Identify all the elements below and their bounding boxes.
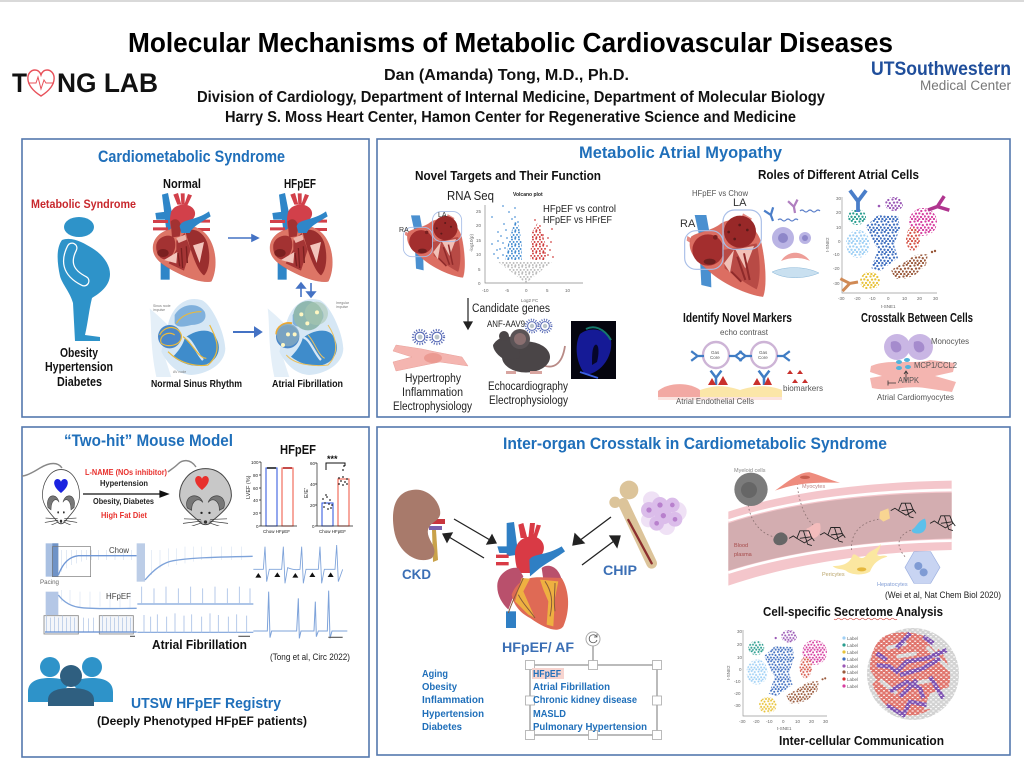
chart: ECG traces (44, 543, 347, 638)
legend: comparisons: HFpEF vs control (543, 204, 616, 215)
chart: spatial hexagon map (867, 628, 959, 720)
icon: atria heart with RA LA (399, 212, 465, 277)
icon: sinus rhythm heart: impulse (153, 308, 165, 312)
legend: cell clusters: Label (847, 643, 858, 648)
legend: cell clusters: Label (847, 670, 858, 675)
chart: volcano plot: 20 (476, 223, 482, 228)
icon: stem cell cluster (641, 491, 687, 535)
diagram: blood vessel secretome: plasma (734, 552, 753, 558)
label: HFpEF AF: HFpEF/ AF (502, 640, 574, 655)
label: echo contrast: echo contrast (720, 327, 769, 337)
legend: cell clusters: Label (847, 650, 858, 655)
label: atrial endothelial cells: Atrial Endothelial Cells (676, 396, 754, 406)
chart: volcano plot: -log10(p) (469, 233, 474, 252)
chart: E/E': 20 (310, 503, 316, 508)
title: Molecular Mechanisms of Metabolic Cardiovascular Diseases (128, 27, 893, 58)
chart: LVEF: LVEF (%) (246, 475, 252, 499)
icon: AAV particles (526, 320, 551, 332)
legend: cell clusters: Label (847, 684, 858, 689)
chart: tSNE secretome: 10 (737, 655, 743, 660)
image: fluorescence heart section (571, 321, 616, 379)
chart: volcano plot: Volcano plot (513, 192, 543, 198)
caption: atrial fibrillation: Atrial Fibrillation (152, 637, 247, 652)
icons: atrial cell types (764, 200, 820, 278)
text list: conditions: Chronic kidney disease (533, 694, 637, 706)
arrows: bidirectional (297, 283, 315, 297)
risk factor list: Hypertension (45, 360, 113, 374)
chart: LVEF: 0 (256, 524, 259, 529)
chart: tSNE clusters: 0 (887, 296, 890, 301)
text: readouts in vivo: Electrophysiology (489, 395, 568, 407)
text list: risk factors: Diabetes (422, 721, 462, 733)
text list: risk factors (422, 668, 484, 733)
label: CHIP: CHIP (603, 563, 637, 578)
logo: UT Southwestern: UTSouthwestern (871, 59, 1011, 80)
diagram: blood vessel secretome (728, 468, 955, 588)
risk factor list: Diabetes (57, 375, 102, 389)
chart: tSNE clusters: -20 (833, 266, 840, 271)
chart: tSNE secretome: 10 (795, 719, 801, 724)
heading: Metabolic Atrial Myopathy (579, 143, 783, 162)
label: metabolic syndrome: Metabolic Syndrome (31, 197, 136, 211)
icon: control mouse (22, 464, 80, 527)
chart: E/E': 0 (312, 524, 315, 529)
chart: LVEF (246, 460, 297, 534)
text list: conditions: HFpEF (533, 668, 561, 680)
chart: volcano plot: Log2 FC (521, 298, 539, 303)
panel: two-hit mouse model (22, 427, 369, 757)
logo: Tong Lab: NG LAB (57, 68, 158, 98)
chart: LVEF: Chow HFpEF (263, 529, 290, 534)
label: chow: Chow (109, 545, 130, 555)
label: normal: Normal (163, 177, 201, 191)
icon: atria heart with RA LA: LA (438, 212, 447, 219)
diagram: monocyte crosstalk (870, 334, 956, 392)
diagram: targeted microbubbles: Gas (759, 350, 768, 355)
chart: tSNE secretome: 30 (823, 719, 829, 724)
text: readouts in vitro (393, 373, 472, 413)
chart: tSNE clusters: 30 (933, 296, 939, 301)
text: readouts in vivo (488, 381, 568, 407)
heading: Cardiometabolic Syndrome (98, 147, 285, 166)
subheading: crosstalk: Crosstalk Between Cells (861, 311, 973, 325)
icon: large atria heart (685, 210, 765, 297)
chart: volcano plot: 0 (525, 288, 528, 293)
legend: cell clusters (842, 636, 858, 689)
arrow: rhythm progression (233, 328, 261, 336)
chart: E/E': Chow HFpEF (319, 529, 346, 534)
icon: sinus rhythm heart: AV node (173, 370, 186, 374)
arrow: normal to HFpEF (228, 235, 258, 241)
icon: mouse (493, 329, 565, 374)
panel: metabolic atrial myopathy (377, 139, 1010, 417)
selection box with handles (526, 632, 662, 740)
diagram: targeted microbubbles: Gas (711, 350, 720, 355)
icon: HFpEF heart (270, 193, 332, 282)
caption: normal sinus rhythm: Normal Sinus Rhythm (151, 379, 242, 390)
logo: Tong Lab: T (12, 68, 27, 98)
chart: tSNE clusters: 10 (902, 296, 908, 301)
label: LA: LA (733, 197, 747, 209)
chart: tSNE secretome: -10 (734, 679, 741, 684)
icon: people group (28, 657, 113, 706)
text: readouts in vivo: Echocardiography (488, 381, 568, 393)
chart: volcano plot: -10 (482, 288, 489, 293)
risk factor list: Obesity (60, 346, 98, 360)
chart: volcano plot: 5 (478, 267, 481, 272)
chart: volcano plot: 5 (546, 288, 549, 293)
chart: volcano plot: 0 (478, 281, 481, 286)
chart: tSNE clusters: -10 (869, 296, 876, 301)
subheading: secretome: Cell-specific Secretome Analysis (763, 605, 943, 619)
chart: tSNE clusters: -30 (833, 281, 840, 286)
diagram: targeted microbubbles (658, 342, 808, 400)
chart: tSNE clusters: -30 (838, 296, 845, 301)
text list: conditions (532, 668, 647, 733)
chart: LVEF: 20 (253, 511, 259, 516)
subheading: registry detail: (Deeply Phenotyped HFpEF patients) (97, 714, 307, 728)
chart: tSNE clusters (825, 190, 949, 309)
text: readouts in vitro: Electrophysiology (393, 401, 472, 413)
text: treatment: Obesity, Diabetes (93, 496, 154, 506)
chart: tSNE clusters: 20 (917, 296, 923, 301)
chart: tSNE secretome: 0 (782, 719, 785, 724)
chart: E/E': E/E' (304, 488, 310, 498)
text list: conditions: Pulmonary Hypertension (533, 721, 647, 733)
risk factor list (45, 346, 113, 389)
diagram: blood vessel secretome: Hepatocytes (877, 582, 908, 588)
arrow: diet treatment (83, 491, 168, 497)
logo: UT Southwestern (871, 59, 1011, 93)
legend: comparisons (543, 204, 616, 226)
chart: volcano plot: -5 (505, 288, 509, 293)
panel: cardiometabolic syndrome (22, 139, 369, 417)
chart: LVEF: 80 (253, 473, 259, 478)
subheading: novel targets: Novel Targets and Their Function (415, 169, 601, 183)
icon: atrial fibrillation heart: Irregular (336, 301, 350, 305)
chart: E/E': *** (327, 454, 338, 464)
chart: tSNE secretome: -20 (734, 691, 741, 696)
icon: sinus rhythm heart (150, 299, 225, 377)
label: HFpEF chart title: HFpEF (280, 442, 316, 457)
logo: Tong Lab (12, 68, 158, 98)
chart: volcano plot: 25 (476, 209, 482, 214)
label: MCP1 CCL2: MCP1/CCL2 (914, 360, 957, 370)
chart: tSNE secretome (726, 629, 829, 731)
label: HFpEF trace: HFpEF (106, 591, 131, 601)
icon: atria heart with RA LA: RA (399, 227, 409, 234)
label: ANF-AAV9: ANF-AAV9 (487, 319, 525, 330)
icon: kidney (393, 490, 445, 562)
chart: E/E': 60 (310, 461, 316, 466)
icon: cardiomyocyte (393, 345, 468, 371)
chart: tSNE secretome: -30 (739, 719, 746, 724)
text list: risk factors: Aging (422, 668, 448, 680)
label: monocytes: Monocytes (931, 336, 969, 346)
heading: Inter-organ Crosstalk in Cardiometabolic Syndrome (503, 434, 887, 453)
text list: conditions: Atrial Fibrillation (533, 681, 610, 693)
text list: conditions: MASLD (533, 708, 566, 720)
icon: heart exterior (496, 522, 568, 630)
label: HFpEF: HFpEF (284, 177, 316, 191)
arrow: candidate genes (464, 298, 472, 329)
chart: volcano plot: 15 (476, 238, 482, 243)
label: CKD: CKD (402, 567, 431, 582)
text list: risk factors: Inflammation (422, 694, 484, 706)
diagram: targeted microbubbles: Core (710, 355, 720, 360)
chart: tSNE secretome: 20 (737, 642, 743, 647)
chart: tSNE secretome: t-SNE2 (726, 665, 731, 680)
subheading: atrial cells: Roles of Different Atrial Cells (758, 168, 919, 182)
arrows: bone heart (573, 517, 620, 565)
diagram: blood vessel secretome: Pericytes (822, 572, 845, 578)
label: candidate genes: Candidate genes (472, 303, 550, 315)
chart: volcano plot: 10 (565, 288, 571, 293)
panel: inter-organ crosstalk (377, 427, 1010, 755)
caption: atrial fibrillation: Atrial Fibrillation (272, 379, 343, 390)
chart: LVEF: 40 (253, 498, 259, 503)
chart: E/E' (304, 454, 353, 534)
logo: UT Southwestern: Medical Center (920, 78, 1011, 93)
chart: tSNE clusters: -20 (854, 296, 861, 301)
icon: normal heart (153, 193, 215, 282)
citation: (Tong et al, Circ 2022) (270, 652, 350, 662)
affiliation line 1: Division of Cardiology, Department of Internal Medicine, Department of Molecular Biology (197, 89, 825, 106)
icon: atrial fibrillation heart (268, 299, 350, 377)
diagram: blood vessel secretome: Myocytes (802, 484, 825, 490)
icon: sinus rhythm heart: Sinus node (153, 304, 171, 308)
label: RNA seq: RNA Seq (447, 188, 494, 203)
legend: comparisons: HFpEF vs HFrEF (543, 215, 612, 226)
arrows: kidney heart (443, 519, 496, 558)
diagram: blood vessel secretome: Myeloid cells (734, 468, 766, 474)
text list: risk factors: Obesity (422, 681, 457, 693)
text: readouts in vitro: Inflammation (402, 387, 463, 399)
chart: LVEF: 100 (251, 460, 259, 465)
citation: (Wei et al, Nat Chem Biol 2020) (885, 590, 1001, 600)
author: Dan (Amanda) Tong, M.D., Ph.D. (384, 67, 629, 84)
chart: tSNE clusters: 30 (836, 196, 842, 201)
chart: tSNE clusters: t-SNE2 (825, 237, 830, 252)
text: treatment: High Fat Diet (101, 510, 147, 520)
icon: transduced virus (413, 330, 444, 344)
label: HFpEF vs chow: HFpEF vs Chow (692, 188, 749, 198)
legend: cell clusters: Label (847, 664, 858, 669)
chart: LVEF: 60 (253, 486, 259, 491)
icon: HFpEF mouse (168, 461, 231, 528)
icon: bone (609, 481, 652, 563)
chart: tSNE secretome: -10 (766, 719, 773, 724)
chart: E/E': 40 (310, 482, 316, 487)
caption: inter-cellular communication: Inter-cellular Communication (779, 734, 944, 748)
chart: tSNE secretome: t-SNE1 (777, 726, 792, 731)
chart: tSNE clusters: 0 (838, 239, 841, 244)
chart: tSNE clusters: t-SNE1 (881, 304, 896, 309)
diagram: blood vessel secretome: Blood (734, 543, 748, 549)
chart: tSNE secretome: 0 (739, 667, 742, 672)
legend: cell clusters: Label (847, 677, 858, 682)
label: atrial cardiomyocytes: Atrial Cardiomyocytes (877, 392, 954, 402)
label: biomarkers: biomarkers (783, 383, 823, 393)
label: RA: RA (680, 218, 696, 230)
chart: tSNE secretome: -20 (753, 719, 760, 724)
label: AMPK: AMPK (898, 375, 919, 385)
legend: cell clusters: Label (847, 657, 858, 662)
diagram: targeted microbubbles: Core (758, 355, 768, 360)
subheading: novel markers: Identify Novel Markers (683, 311, 792, 325)
icon: atrial fibrillation heart: impulse (336, 305, 348, 309)
label: pacing: Pacing (40, 580, 59, 586)
chart: tSNE clusters: 10 (836, 225, 842, 230)
chart: tSNE clusters: 20 (836, 210, 842, 215)
text: readouts in vitro: Hypertrophy (405, 373, 461, 385)
affiliation line 2: Harry S. Moss Heart Center, Hamon Center for Regenerative Science and Medicine (225, 109, 796, 126)
text list: risk factors: Hypertension (422, 708, 484, 720)
text: treatment (85, 467, 167, 520)
chart: volcano plot: 10 (476, 252, 482, 257)
chart: tSNE secretome: 30 (737, 629, 743, 634)
heading: registry: UTSW HFpEF Registry (131, 695, 282, 712)
heading: “Two-hit” Mouse Model (64, 431, 233, 450)
chart: tSNE secretome: 20 (809, 719, 815, 724)
text: treatment: Hypertension (100, 478, 148, 488)
text: treatment: L-NAME (NOs inhibitor) (85, 467, 167, 477)
chart: tSNE secretome: -30 (734, 703, 741, 708)
legend: cell clusters: Label (847, 636, 858, 641)
icon: obese person (58, 217, 110, 341)
chart: tSNE clusters: -10 (833, 252, 840, 257)
chart: volcano plot (469, 192, 583, 303)
